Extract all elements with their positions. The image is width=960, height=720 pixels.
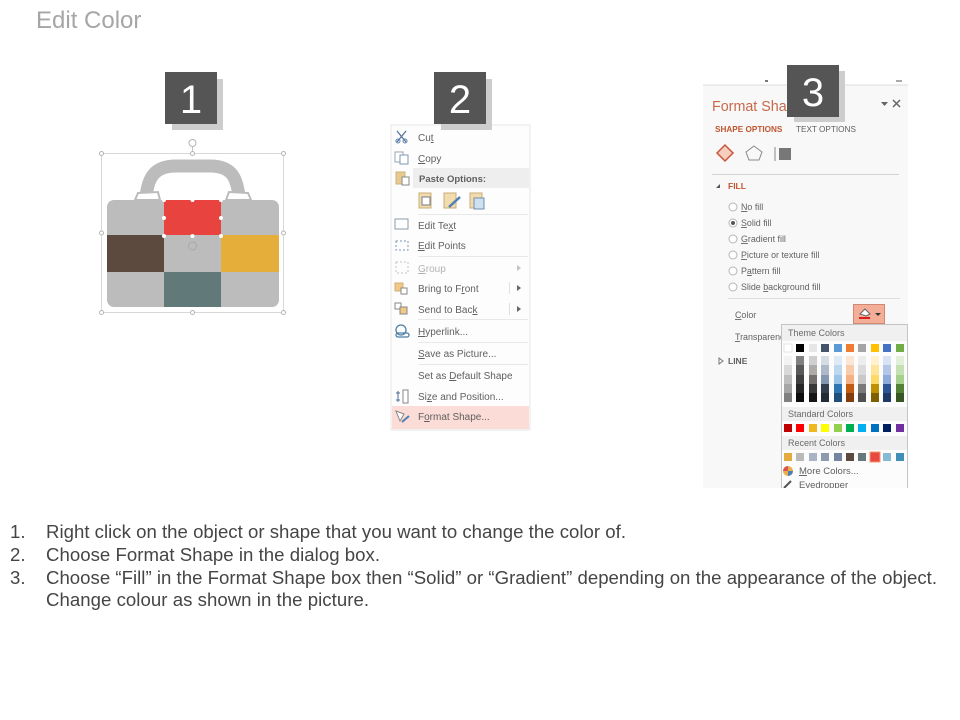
icon: briefcase handle [135, 166, 251, 200]
menu labels: Format Shape... [418, 412, 490, 423]
fill radio options: Pattern fill [741, 266, 780, 276]
step 1 text: Right click on the object or shape that you want to change the color of. [46, 521, 626, 542]
badge 2: 2 [449, 78, 471, 122]
menu labels: Set as Default Shape [418, 371, 513, 382]
badge 3 [787, 65, 845, 122]
step 2 text: 2. [10, 544, 26, 565]
pane divider 2 [728, 298, 900, 300]
theme colors label: Theme Colors [788, 328, 845, 338]
pane tabs: SHAPE OPTIONS [715, 125, 783, 134]
fill radio options [729, 202, 820, 292]
eyedropper label: Eyedropper [799, 480, 848, 491]
fill heading [716, 181, 746, 191]
menu labels: Copy [418, 154, 441, 165]
menu labels [418, 133, 513, 423]
title: Edit Color [36, 7, 141, 34]
panel: step 3 format shape pane [700, 65, 915, 496]
theme color row [784, 344, 904, 352]
recent colors heading [782, 436, 907, 450]
step 3 text: 3. [10, 567, 26, 588]
line heading: LINE [728, 356, 748, 366]
menu labels: Edit Text [418, 221, 456, 232]
menu highlights [392, 168, 529, 429]
menu labels: Group [418, 264, 446, 275]
step 3 text: Change colour as shown in the picture. [46, 589, 369, 610]
step 3 text [10, 567, 937, 610]
fill radio options: Slide background fill [741, 282, 820, 292]
pane close controls [881, 100, 900, 107]
badge 2 [434, 72, 492, 130]
menu labels: Paste Options: [419, 174, 486, 185]
recent color row [784, 452, 904, 462]
menu separators [418, 214, 528, 364]
icon: eyedropper [784, 481, 791, 488]
line heading [719, 356, 748, 366]
badge 1 [165, 72, 223, 130]
menu labels: Size and Position... [418, 392, 504, 403]
panel: step 2 context menu [391, 72, 530, 430]
color and transparency labels: Transparenc [735, 332, 785, 342]
standard colors label: Standard Colors [788, 409, 854, 419]
menu labels: Send to Back [418, 305, 478, 316]
badge 1: 1 [180, 78, 202, 122]
submenu arrows [510, 265, 521, 315]
badge 3: 3 [802, 71, 824, 115]
fill radio options: Solid fill [741, 218, 772, 228]
color and transparency labels: Color [735, 310, 756, 320]
fill radio options: Picture or texture fill [741, 250, 819, 260]
icon: briefcase body [107, 200, 279, 307]
menu labels: Bring to Front [418, 284, 479, 295]
more colors label: More Colors... [799, 466, 859, 477]
standard color row [784, 424, 904, 432]
recent colors label: Recent Colors [788, 438, 846, 448]
standard colors heading [782, 407, 907, 421]
theme color shades [784, 356, 904, 402]
selection frame [100, 140, 286, 314]
fill radio options: No fill [741, 202, 763, 212]
fill radio options: Gradient fill [741, 234, 786, 244]
menu labels: Hyperlink... [418, 327, 468, 338]
pane title: Format Sha [712, 99, 787, 115]
pane tabs: TEXT OPTIONS [796, 125, 856, 134]
color dropdown [782, 324, 908, 491]
theme colors heading [782, 325, 907, 341]
pane tab icons [717, 145, 791, 161]
menu icons [395, 131, 484, 422]
pane background [703, 85, 908, 488]
pane top edge [703, 80, 908, 85]
step 3 text: Choose “Fill” in the Format Shape box then “Solid” or “Gradient” depending on the appearance of the object. [46, 567, 937, 588]
pane divider [712, 174, 899, 176]
menu labels: Edit Points [418, 241, 466, 252]
menu labels: Save as Picture... [418, 349, 496, 360]
step 2 text: Choose Format Shape in the dialog box. [46, 544, 380, 565]
icon: more colors wheel [783, 466, 793, 476]
menu labels: Cut [418, 133, 434, 144]
fill heading: FILL [728, 181, 746, 191]
panel: step 1 shape [100, 72, 286, 314]
color and transparency labels [735, 310, 785, 342]
step 1 text: 1. [10, 521, 26, 542]
color button [854, 304, 884, 324]
pane tabs [715, 125, 856, 134]
white mask below pane [700, 488, 915, 496]
menu background [391, 125, 530, 430]
instructions list [10, 521, 937, 610]
